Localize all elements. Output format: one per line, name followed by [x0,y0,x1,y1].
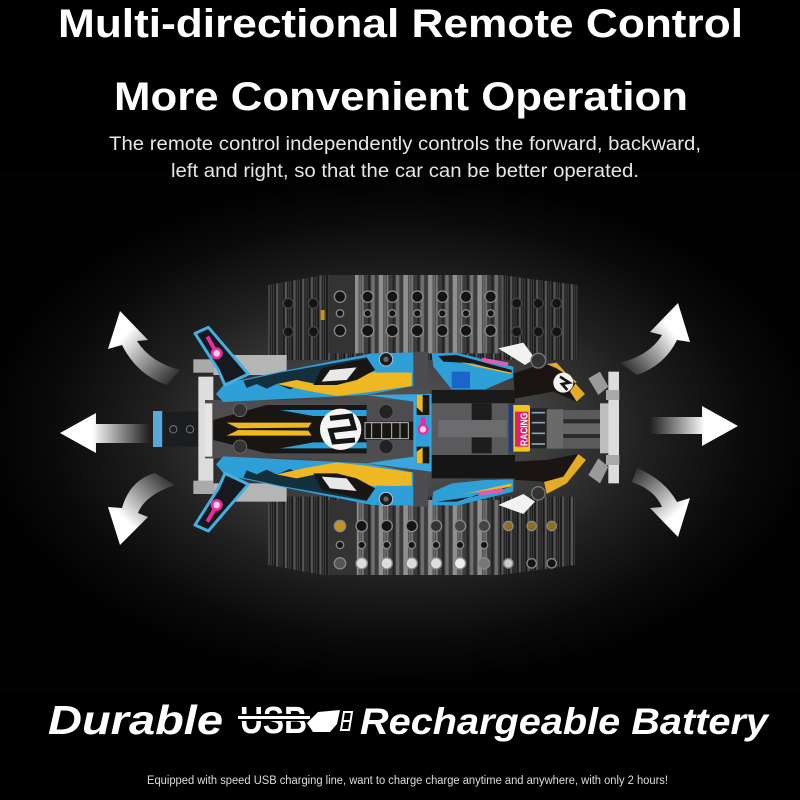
footer caption: Equipped with speed USB charging line, want to charge charge anytime and anywhere, with only 2 hours! [147,775,668,787]
heading: Durable USB Rechargeable Battery: Durable [48,697,223,743]
arrow: forward right [620,303,690,375]
icon: USB plug: USB [240,700,307,742]
centre plate and yellow racing block [432,403,530,455]
front lower bodywork [413,454,586,514]
tracked vehicle [153,275,619,575]
heading: Durable USB Rechargeable Battery: Rechargeable Battery [360,701,771,742]
lower blue wing [195,456,413,531]
decal: number emblem [320,409,361,450]
arrow: backward right [632,468,690,537]
arrow: forward left [108,311,180,385]
description text: left and right, so that the car can be better operated. [171,160,639,182]
description text: The remote control independently controls the forward, backward, [109,133,701,155]
bottom track [268,497,575,575]
title line 1: Multi-directional Remote Control [58,2,743,46]
glow behind the car [0,170,800,690]
centre body [205,394,435,472]
front upper bodywork [413,343,585,403]
arrow: left [60,413,150,453]
front cylinders and axle [530,372,619,483]
description text [109,133,701,182]
centre plate and yellow racing block: RACING [519,412,530,446]
heading: Durable USB Rechargeable Battery [48,697,771,743]
title line 2: More Convenient Operation [114,75,688,119]
upper blue wing [195,327,413,402]
arrow: backward left [108,473,175,545]
arrow: right [650,406,738,446]
top track [268,275,578,360]
rear mount and cylinder [153,355,287,502]
